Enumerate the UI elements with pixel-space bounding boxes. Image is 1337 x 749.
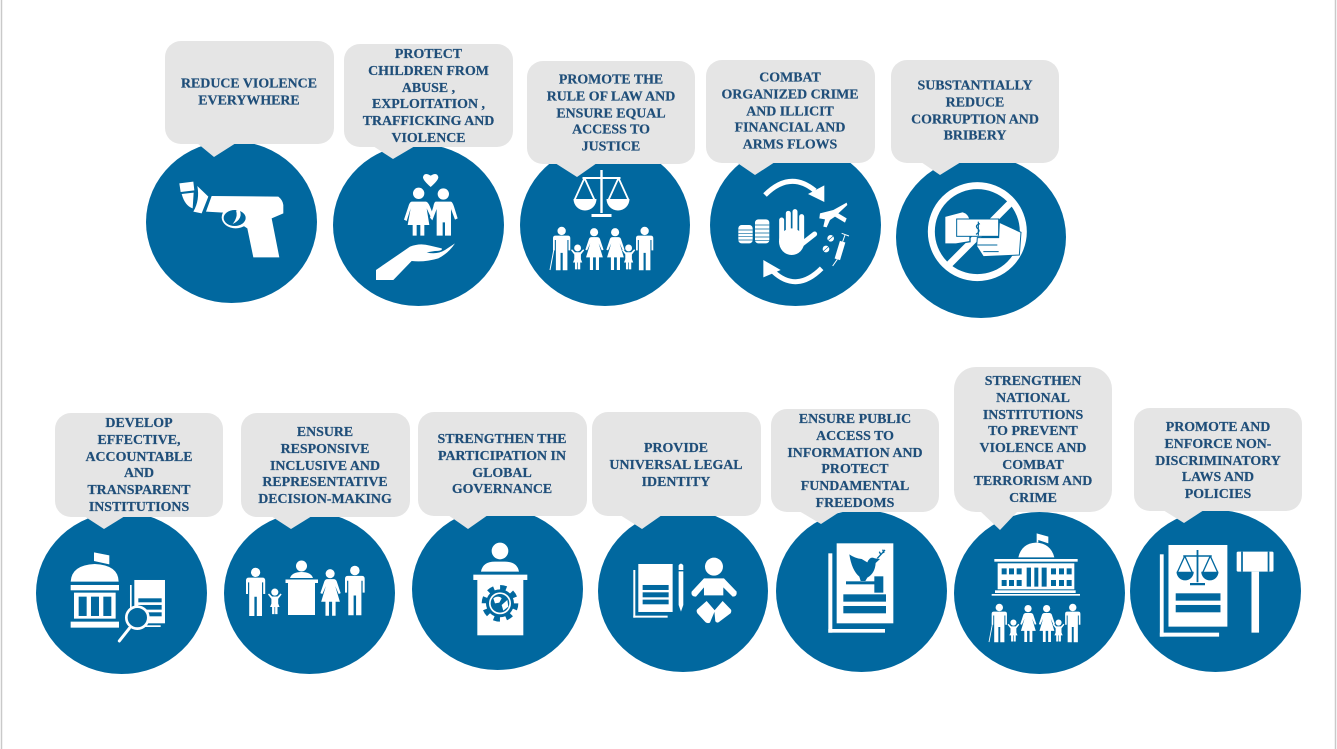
speech bubble: INFORMATION AND [787, 446, 923, 461]
speech bubble: REDUCE [946, 96, 1004, 110]
icon: broken gun [179, 182, 283, 257]
speech bubble [418, 412, 587, 529]
speech bubble: ENSURE EQUAL [556, 106, 666, 122]
panel: non-discriminatory laws [1130, 408, 1302, 672]
speech bubble [771, 409, 939, 524]
speech bubble: TRAFFICKING AND [363, 114, 494, 129]
speech bubble: PROVIDE [644, 441, 708, 456]
speech bubble: INSTITUTIONS [89, 500, 189, 515]
icon: parliament and family [989, 533, 1080, 642]
icon: no bribery [931, 186, 1023, 278]
speech bubble: STRENGTHEN THE [437, 432, 567, 447]
speech bubble [527, 61, 695, 177]
speech bubble: REPRESENTATIVE [262, 475, 388, 490]
speech bubble: RULE OF LAW AND [547, 90, 675, 104]
panel: rule of law [520, 61, 695, 306]
speech bubble: AND [124, 466, 154, 481]
icon: document with dove and gavel [828, 543, 893, 633]
speech bubble: IDENTITY [642, 475, 710, 490]
speech bubble: UNIVERSAL LEGAL [609, 458, 743, 473]
speech bubble: RESPONSIVE [281, 442, 369, 457]
speech bubble: FREEDOMS [816, 496, 895, 511]
speech bubble: EVERYWHERE [198, 94, 300, 108]
speech bubble: FINANCIAL AND [735, 120, 845, 136]
panel: public access to information [771, 409, 947, 672]
speech bubble: ENFORCE NON- [1165, 437, 1272, 452]
panel: combat crime [706, 60, 881, 306]
icon: children over a hand [376, 174, 458, 280]
speech bubble: PROTECT [395, 47, 463, 62]
speech bubble: ACCESS TO [572, 122, 650, 138]
speech bubble: TO PREVENT [988, 424, 1079, 439]
speech bubble: POLICIES [1185, 487, 1251, 502]
speech bubble [241, 413, 410, 529]
speech bubble: PROTECT [821, 462, 889, 477]
speech bubble: COMBAT [759, 70, 821, 86]
speech bubble [954, 367, 1112, 530]
panel: reduce corruption [891, 60, 1066, 318]
speech bubble: PROMOTE THE [559, 72, 663, 88]
speech bubble: VIOLENCE [391, 131, 466, 146]
panel: effective institutions [36, 413, 223, 674]
speech bubble: STRENGTHEN [985, 374, 1081, 389]
speech bubble: DECISION-MAKING [258, 492, 392, 507]
panel: protect children [333, 44, 513, 306]
speech bubble: VIOLENCE AND [980, 441, 1086, 456]
speech bubble: EFFECTIVE, [98, 433, 180, 448]
speech bubble: FUNDAMENTAL [801, 479, 909, 494]
icon: institution and magnifier [71, 552, 165, 641]
panel: national institutions [954, 367, 1125, 674]
speech bubble: REDUCE VIOLENCE [181, 76, 317, 92]
speech bubble: BRIBERY [944, 128, 1006, 144]
speech bubble [165, 41, 334, 157]
speech bubble [344, 44, 513, 159]
speech bubble: DISCRIMINATORY [1155, 454, 1281, 469]
speech bubble: AND ILLICIT [746, 104, 835, 120]
speech bubble: JUSTICE [582, 140, 640, 154]
speech bubble: ABUSE , [402, 81, 455, 96]
speech bubble: CORRUPTION AND [911, 112, 1039, 128]
speech bubble: TERRORISM AND [974, 474, 1092, 489]
speech bubble: GOVERNANCE [452, 482, 552, 497]
icon: people around podium [246, 560, 365, 616]
speech bubble: ACCESS TO [816, 429, 894, 444]
speech bubble [891, 60, 1059, 175]
speech bubble: DEVELOP [105, 416, 173, 431]
icon: scales and family [550, 170, 653, 270]
panel: inclusive decision-making [224, 413, 410, 674]
speech bubble: ENSURE [297, 425, 353, 440]
speech bubble: ENSURE PUBLIC [799, 412, 911, 427]
icon: speaker with globe gear [473, 543, 527, 635]
speech bubble: CHILDREN FROM [368, 64, 489, 79]
speech bubble: PROMOTE AND [1166, 420, 1270, 435]
panel: global governance [412, 412, 587, 670]
icon: document and baby [633, 558, 737, 623]
speech bubble: NATIONAL [996, 391, 1070, 406]
speech bubble: PARTICIPATION IN [438, 449, 566, 464]
icon: law document and gavel [1160, 545, 1274, 637]
speech bubble: ACCOUNTABLE [85, 450, 193, 465]
panel: reduce violence [146, 41, 334, 303]
speech bubble: LAWS AND [1182, 470, 1254, 485]
speech bubble: INSTITUTIONS [983, 408, 1083, 423]
speech bubble: CRIME [1009, 491, 1057, 506]
speech bubble: EXPLOITATION , [372, 97, 485, 112]
speech bubble: GLOBAL [472, 466, 532, 481]
speech bubble [55, 413, 223, 529]
speech bubble [706, 60, 875, 175]
speech bubble: TRANSPARENT [87, 483, 191, 498]
speech bubble [1134, 408, 1302, 523]
speech bubble: ORGANIZED CRIME [722, 88, 858, 102]
speech bubble: ARMS FLOWS [743, 138, 838, 152]
speech bubble: SUBSTANTIALLY [917, 78, 1033, 94]
speech bubble [592, 412, 761, 529]
speech bubble: INCLUSIVE AND [270, 459, 380, 474]
icon: flows with stop hand [738, 181, 849, 282]
panel: legal identity [592, 412, 768, 672]
speech bubble: COMBAT [1002, 458, 1064, 473]
